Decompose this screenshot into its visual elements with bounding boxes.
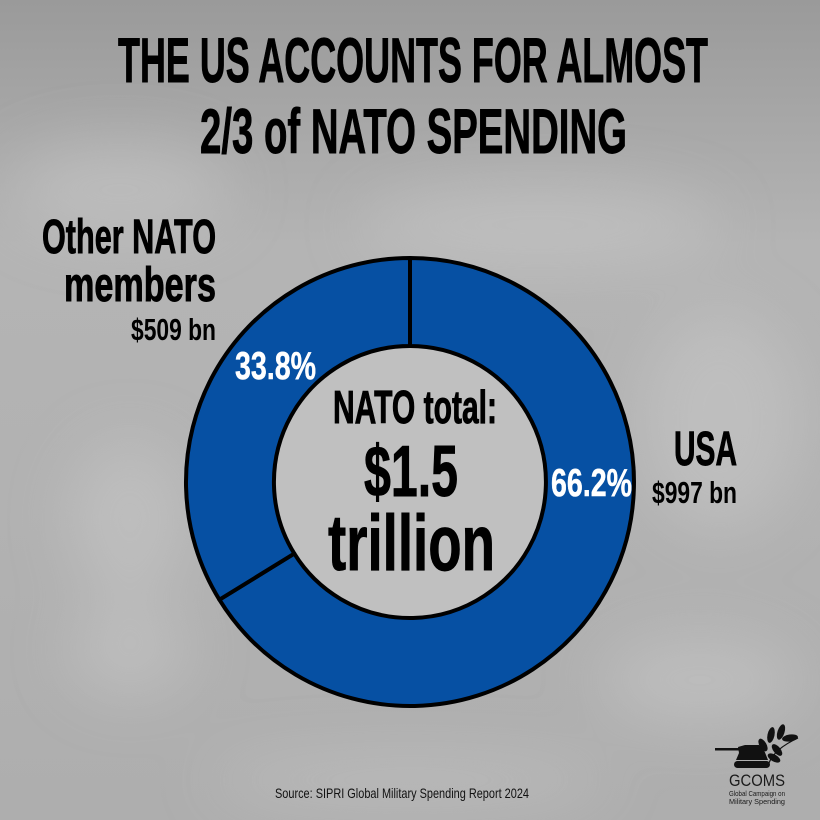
centre total label: $1.5 [364,432,458,512]
segment: Other NATO members 33.8% [186,258,410,600]
icon: tank [715,745,770,768]
label: USA [652,423,737,510]
logo wordmark: Global Campaign on [729,789,785,798]
percentage: 66.2%: 66.2% [551,462,632,505]
centre total label: trillion [328,498,495,587]
source: Source: SIPRI Global Military Spending Report 2024 [275,785,529,801]
logo wordmark: GCOMS [729,771,785,790]
icon: olive branch [756,723,798,766]
label: USA: $997 bn [652,475,737,510]
segment: USA 66.2% [219,258,634,706]
logo wordmark [729,771,785,806]
label: other NATO members: Other NATO [42,211,216,264]
label: USA: USA [674,423,737,476]
centre total label: NATO total: [333,381,497,433]
label: other NATO members: members [64,259,216,312]
donut chart [186,258,634,706]
donut hole shading [276,348,544,616]
logo: GCOMS [715,723,798,806]
centre total label [328,381,497,587]
label: other NATO members [42,211,216,347]
title [118,26,708,167]
label: other NATO members: $509 bn [131,312,216,347]
percentage: 33.8%: 33.8% [235,345,316,388]
logo wordmark: Military Spending [729,797,785,806]
